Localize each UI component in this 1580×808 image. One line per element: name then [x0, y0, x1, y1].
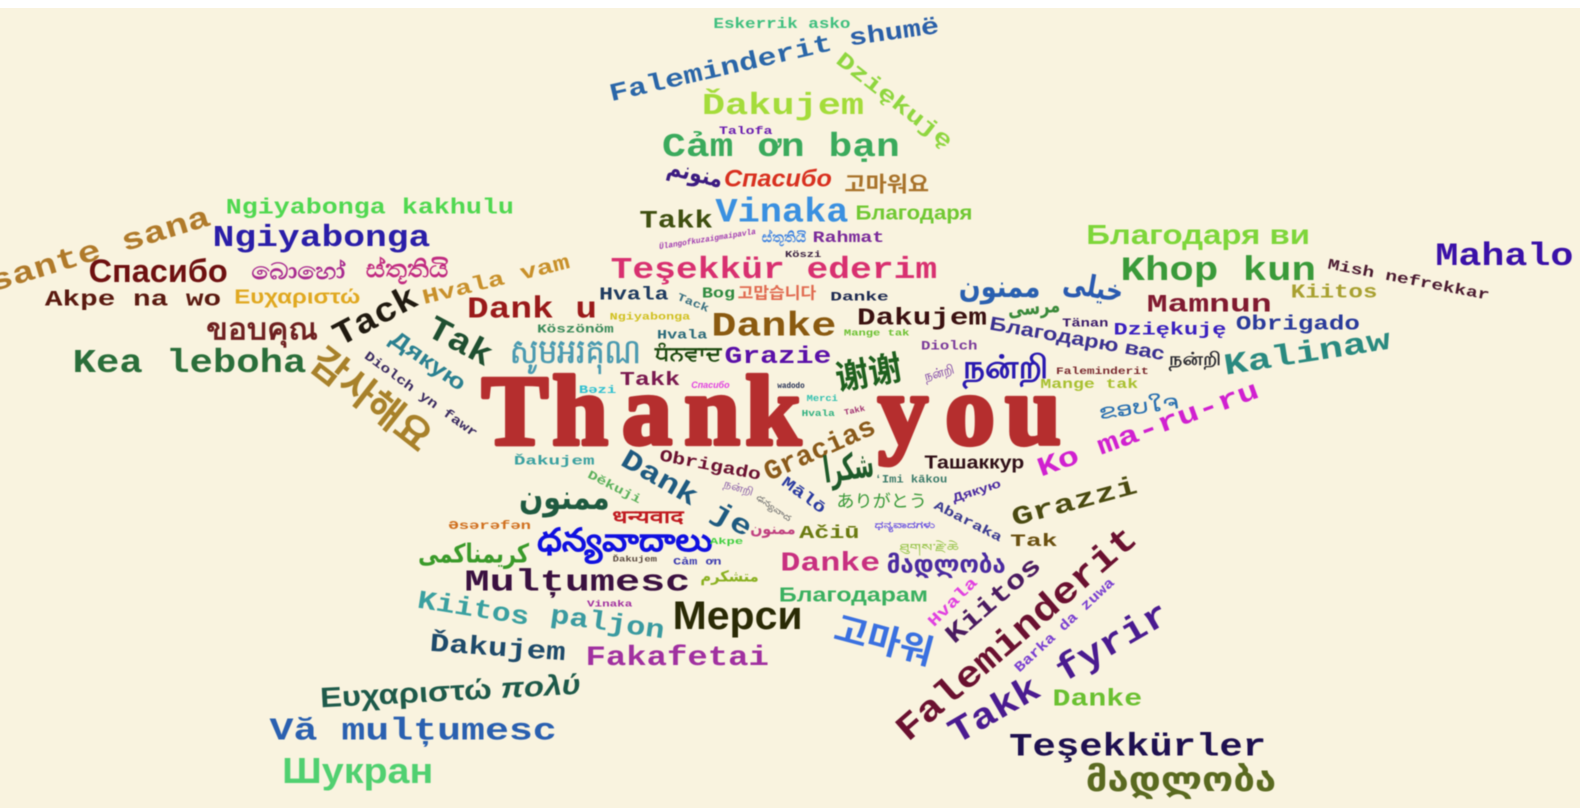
word: Ďakujem tiny: Ďakujem	[613, 555, 657, 564]
word: Takk tiny: Takk	[843, 405, 866, 418]
word: Vă mulțumesc: Vă mulțumesc	[270, 715, 557, 750]
word: Kalinaw: Kalinaw	[1222, 325, 1393, 385]
word: Благодаря ви: Благодаря ви	[1086, 218, 1310, 250]
word: ಧನ್ಯವಾದಗಳು: ಧನ್ಯವಾದಗಳು	[875, 520, 935, 532]
word: Diolch: Diolch	[921, 339, 978, 354]
word: ممنون blue: ممنون	[959, 271, 1040, 305]
word: Mamnun: Mamnun	[1147, 290, 1272, 319]
word: Dank je: Dank je	[615, 445, 757, 545]
word: Kiitos teal: Kiitos	[415, 586, 531, 633]
word: Hvala tiny: Hvala	[802, 408, 836, 419]
word: நன்றி blue: நன்றி	[963, 348, 1048, 389]
word: tiny purple: Ülangofkuzaigmaipavla	[659, 228, 757, 252]
word: Khop kun: Khop kun	[1121, 252, 1316, 291]
word: Благодарю вас: Благодарю вас	[988, 314, 1167, 365]
word: Takk fyrir: Takk fyrir	[942, 595, 1177, 754]
word: Dank u: Dank u	[467, 293, 597, 327]
word: متشکرم: متشکرم	[700, 568, 759, 585]
word: Mange tak small: Mange tak	[844, 328, 910, 339]
word: Faleminderit tiny: Faleminderit	[1056, 366, 1149, 378]
word: Дякую teal: Дякую	[386, 325, 471, 396]
word: 谢谢: 谢谢	[831, 339, 905, 400]
word: நன்றி small: நன்றி	[923, 362, 956, 385]
word: Vinaka: Vinaka	[715, 194, 848, 233]
main heading: Thank you: Thank you	[482, 355, 1061, 466]
word: ధన్యవాదాలు: ధన్యవాదాలు	[537, 521, 712, 564]
word: Barka da zuwa: Barka da zuwa	[1012, 575, 1119, 676]
word: ممنون pink: ممنون	[750, 521, 796, 538]
word: Fakafetai: Fakafetai	[585, 643, 769, 674]
word: ʻImi kākou: ʻImi kākou	[875, 475, 947, 487]
word: Tak: Tak	[420, 310, 499, 376]
word: Akpe na wo: Akpe na wo	[45, 287, 221, 312]
word: Děkuji: Děkuji	[585, 468, 643, 507]
word: Ngiyabonga kakhulu: Ngiyabonga kakhulu	[226, 196, 514, 221]
word: Gracias: Gracias	[760, 413, 881, 489]
word: tiny navy: wadodo	[777, 382, 805, 391]
word: Cảm ơn bạn: Cảm ơn bạn	[662, 128, 900, 166]
word: Danke green: Danke	[1052, 686, 1142, 713]
word: நன்றி dark: நன்றி	[1169, 349, 1221, 371]
word: Благодаря: Благодаря	[855, 203, 972, 225]
word: Teşekkürler: Teşekkürler	[1009, 729, 1266, 766]
word: Köszi: Köszi	[785, 249, 822, 260]
word: Bəzi: Bəzi	[579, 385, 617, 397]
word: ཐུགས་རྗེ་ཆེ: ཐུགས་རྗེ་ཆེ	[899, 540, 959, 556]
word: Danke small: Danke	[830, 289, 889, 304]
word: ਧੰਨਵਾਦ: ਧੰਨਵਾਦ	[654, 342, 722, 366]
word: tiny grey: ఢన్యవాద	[754, 493, 793, 525]
word: Hvala navy: Hvala	[599, 285, 669, 305]
word: Hvala teal: Hvala	[657, 328, 708, 343]
word: Mālō: Mālō	[778, 474, 829, 518]
word: Takk olive: Takk	[639, 207, 713, 236]
word: paljon: paljon	[548, 601, 666, 646]
word: Спасибо dark: Спасибо	[89, 253, 228, 289]
word: Шукран: Шукран	[282, 750, 433, 791]
word: Dziękuję blue: Dziękuję	[1113, 322, 1226, 341]
word: Akpe: Akpe	[710, 536, 743, 547]
word: shumë: shumë	[847, 14, 941, 53]
word: Спасибо red: Спасибо	[724, 165, 832, 192]
word: ස්තූතියි: ස්තූතියි	[366, 255, 448, 284]
word: Tänan: Tänan	[1062, 316, 1108, 330]
word: Благодарам: Благодарам	[779, 585, 928, 607]
word: کریمناکمی: کریمناکمی	[418, 538, 530, 569]
word: خیلی: خیلی	[1061, 266, 1126, 309]
word: شكرا: شكرا	[821, 443, 876, 492]
word: Faleminderit: Faleminderit	[607, 30, 835, 109]
word: Bog: Bog	[702, 284, 735, 302]
word: Ďakujem navy: Ďakujem	[429, 629, 567, 668]
word: Obrigado blue: Obrigado	[1236, 314, 1360, 337]
word: Ďakujem teal: Ďakujem	[514, 454, 595, 469]
word: Talofa: Talofa	[719, 126, 773, 138]
word: Mange tak: Mange tak	[1040, 377, 1139, 393]
word: مرسی: مرسی	[1007, 295, 1061, 321]
word: Faleminderit large: Faleminderit	[888, 519, 1146, 751]
word: Tack small: Tack	[675, 292, 711, 316]
word: 고마워: 고마워	[830, 610, 937, 673]
word: Mahalo: Mahalo	[1435, 238, 1573, 275]
word: Mulțumesc: Mulțumesc	[465, 566, 690, 600]
word: Vinaka small: Vinaka	[587, 599, 633, 610]
word: Ташаккур: Ташаккур	[925, 453, 1024, 473]
word: Mish nefrekkar: Mish nefrekkar	[1326, 256, 1491, 305]
word: Diolch yn fawr: Diolch yn fawr	[361, 349, 480, 441]
word: Danke pink: Danke	[780, 548, 880, 579]
word: Hvala pink: Hvala	[925, 574, 982, 631]
word: Dziękuję: Dziękuję	[830, 48, 957, 154]
word: Rahmat: Rahmat	[813, 229, 884, 247]
word: Teşekkür ederim: Teşekkür ederim	[611, 254, 937, 288]
word: धन्यवाद: धन्यवाद	[612, 507, 684, 528]
word: Ευχαριστώ: Ευχαριστώ	[234, 286, 360, 308]
word: Ďakujem: Ďakujem	[702, 89, 864, 124]
word: Grazie: Grazie	[725, 344, 831, 371]
word: 감사해요: 감사해요	[302, 340, 440, 461]
word: Grazzi: Grazzi	[1008, 471, 1141, 534]
word: សូមអរគុណ: សូមអរគុណ	[510, 332, 641, 374]
word: მადლობა violet: მადლობა	[887, 550, 1006, 578]
word: බොහෝ: බොහෝ	[251, 258, 345, 285]
word: Takk maroon: Takk	[620, 369, 680, 391]
word: ممنون green: ممنون	[519, 479, 610, 518]
word: Danke brown: Danke	[711, 308, 836, 347]
word: Tack large: Tack	[327, 279, 425, 356]
word: Dakujem dark: Dakujem	[857, 305, 987, 332]
word: Cảm ơn small: Cảm ơn	[673, 556, 721, 568]
word: ขอบคุณ: ขอบคุณ	[206, 313, 318, 349]
word: Дякую violet: Дякую	[950, 476, 1003, 505]
word: Köszönöm: Köszönöm	[537, 323, 614, 337]
word: ස්තූතියි small: ස්තූතියි	[762, 230, 807, 246]
word: Əsərəfən: Əsərəfən	[448, 519, 531, 533]
word: Abaraka: Abaraka	[931, 498, 1005, 545]
word: Ačiū: Ačiū	[799, 524, 860, 544]
word: Kiitos purple: Kiitos	[940, 551, 1048, 650]
word: منونم: منونم	[665, 154, 726, 194]
word: Мерси: Мерси	[673, 593, 803, 638]
word: ຂອບໃຈ: ຂອບໃຈ	[1097, 389, 1180, 424]
word: Hvala vam: Hvala vam	[420, 251, 572, 311]
word: Ngiyabonga small: Ngiyabonga	[610, 311, 690, 323]
word: Ngiyabonga: Ngiyabonga	[213, 222, 430, 256]
word: Спасибо tiny: Спасибо	[691, 380, 730, 390]
word: Ko ma-ru-ru: Ko ma-ru-ru	[1033, 376, 1264, 485]
word: 고맙습니다: 고맙습니다	[738, 284, 816, 302]
word: ありがとう: ありがとう	[836, 487, 927, 512]
word: Kea leboha: Kea leboha	[73, 344, 306, 382]
word: 고마워요: 고마워요	[844, 172, 929, 196]
word: Obrigado maroon: Obrigado	[658, 448, 762, 486]
word: நன்றி violet tiny: நன்றி	[722, 477, 755, 499]
word: Merci: Merci	[807, 393, 839, 404]
word: მადლობა olive: მადლობა	[1086, 760, 1276, 800]
word: Eskerrik asko: Eskerrik asko	[713, 15, 850, 33]
word: Tak olive: Tak	[1010, 533, 1058, 552]
word: Kiitos olive: Kiitos	[1291, 281, 1377, 303]
word: Ευχαριστώ πολύ: Ευχαριστώ πολύ	[319, 668, 582, 713]
